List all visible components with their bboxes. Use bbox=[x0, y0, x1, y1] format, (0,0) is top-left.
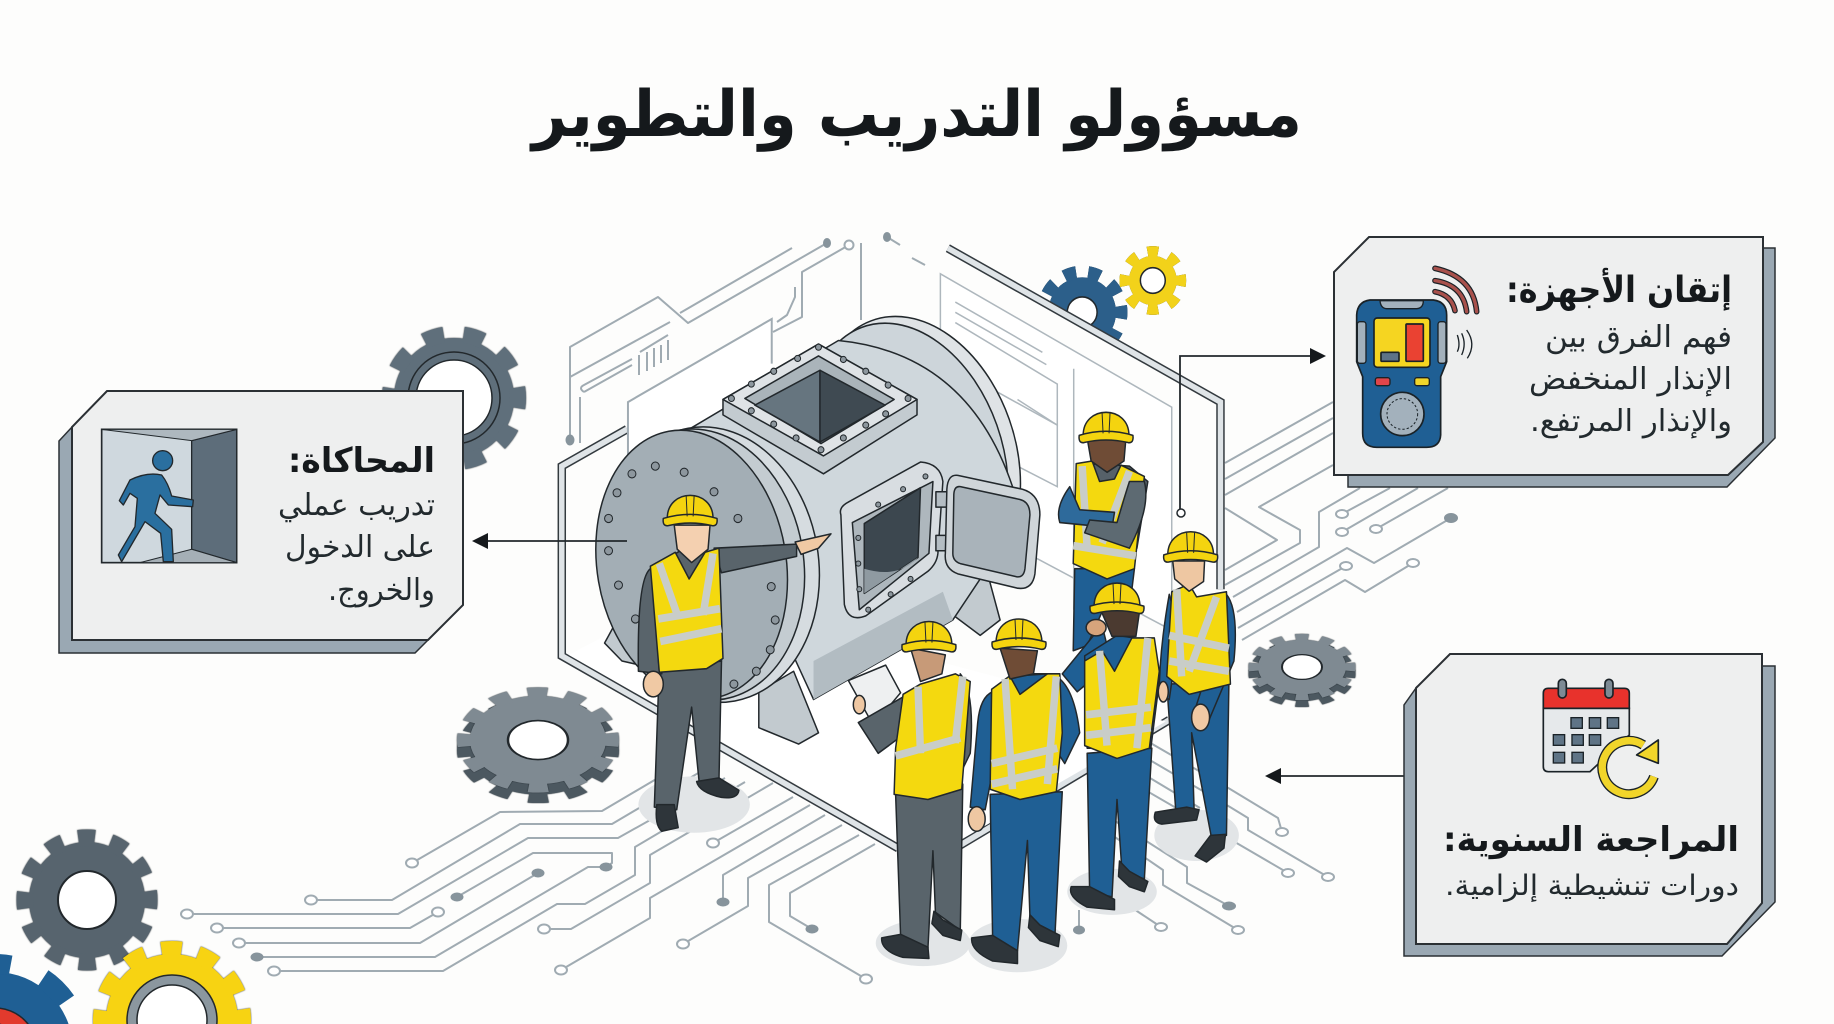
tank rear flange bbox=[780, 287, 1056, 620]
back wall panels bbox=[940, 274, 1172, 630]
text: device mastery description: الإنذار المنخفض bbox=[1529, 362, 1732, 397]
icon: gear behind left card bbox=[390, 334, 518, 462]
icon: yellow gear top bbox=[1125, 252, 1181, 309]
panel: device mastery bbox=[1334, 237, 1775, 487]
worker: far right bbox=[1154, 532, 1239, 862]
heading: annual review: المراجعة السنوية: bbox=[1443, 820, 1739, 860]
tank body bbox=[689, 341, 1013, 699]
icon: calendar with refresh arrow bbox=[1543, 679, 1658, 794]
arrow: annual review card bbox=[1265, 768, 1404, 784]
frame: glass box bbox=[562, 248, 1220, 848]
icon: large gear left centre bbox=[466, 693, 610, 797]
arrow: simulation card bbox=[472, 533, 627, 549]
text: simulation description bbox=[278, 488, 435, 608]
icon: small gear right centre bbox=[1255, 638, 1349, 703]
icon: gas detector bbox=[1357, 268, 1477, 447]
tank side manway bbox=[840, 462, 943, 618]
text: device mastery description: والإنذار المرتفع. bbox=[1530, 404, 1732, 439]
circuit traces bbox=[181, 232, 1458, 984]
text: simulation description: والخروج. bbox=[328, 573, 435, 608]
tank supports bbox=[605, 574, 1000, 744]
panel: simulation bbox=[59, 391, 463, 653]
text: simulation description: تدريب عملي bbox=[278, 488, 435, 523]
icon: blue gear top bbox=[1043, 272, 1121, 352]
white mask below frame top edge bbox=[940, 248, 1220, 476]
tank front bolts bbox=[605, 462, 779, 688]
floor bbox=[569, 594, 1166, 842]
central illustration: tank, frame and workers bbox=[562, 248, 1239, 972]
worker: hand on chin bbox=[1062, 583, 1159, 915]
text: simulation description: على الدخول bbox=[285, 530, 435, 565]
wall panel behind tank bbox=[628, 319, 772, 487]
tank bbox=[576, 287, 1056, 744]
worker: back with crossed arms bbox=[1059, 412, 1148, 651]
text: device mastery description bbox=[1529, 320, 1732, 439]
worker: center bbox=[968, 619, 1080, 972]
icon: gray gear bottom left bbox=[25, 838, 149, 962]
tank front flange bbox=[583, 409, 840, 720]
heading: simulation: المحاكاة: bbox=[288, 441, 435, 481]
arrow: device card bbox=[1177, 348, 1326, 517]
panel: annual review bbox=[1404, 654, 1775, 956]
text: annual review description: دورات تنشيطية إلزامية. bbox=[1445, 869, 1739, 902]
tank hatch door bbox=[936, 475, 1040, 588]
text: device mastery description: فهم الفرق بين bbox=[1545, 320, 1732, 355]
heading: device mastery: إتقان الأجهزة: bbox=[1506, 267, 1732, 311]
tank top hatch bbox=[723, 344, 917, 474]
worker: with clipboard bbox=[848, 622, 971, 966]
icon: blue gear with red hub bottom left bbox=[0, 954, 74, 1024]
worker: pointing supervisor bbox=[638, 495, 831, 833]
icon: yellow gear bottom left bbox=[92, 940, 252, 1024]
title: مسؤولو التدريب والتطوير bbox=[529, 78, 1302, 152]
icon: person walking through door bbox=[102, 429, 237, 563]
